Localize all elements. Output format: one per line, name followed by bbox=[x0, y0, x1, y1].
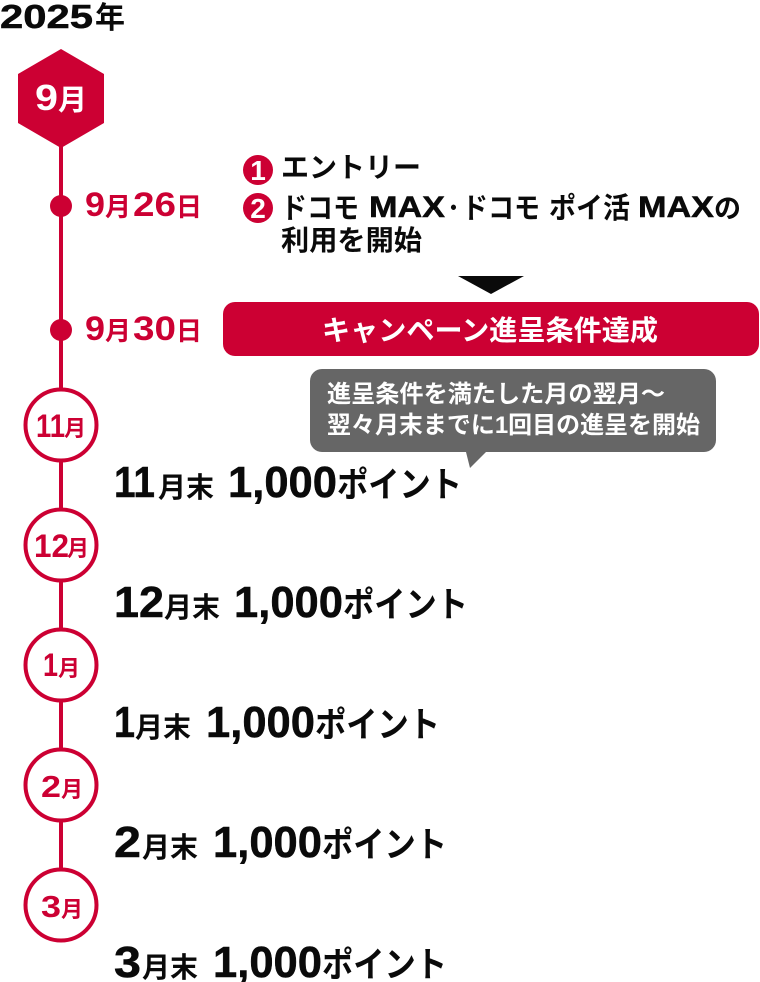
step 1: entry: 1 bbox=[250, 155, 266, 186]
title: 2025年 bbox=[0, 0, 125, 35]
reward: end of November bbox=[114, 458, 462, 507]
milestone: September hexagon: 9 bbox=[35, 77, 58, 118]
banner: campaign condition met: キャンペーン進呈条件達成 bbox=[322, 315, 658, 346]
milestone: September 30: 9 bbox=[85, 310, 105, 348]
step 2: plan start: ･ bbox=[447, 193, 460, 224]
callout: grant timing: 進呈条件を満たした月の翌月～ bbox=[327, 381, 665, 408]
banner: campaign condition met bbox=[223, 302, 759, 356]
reward: end of November: ポイント bbox=[337, 466, 462, 505]
reward: end of February: 月末 bbox=[142, 832, 198, 863]
reward: end of January: 1 bbox=[114, 698, 135, 747]
reward: end of December bbox=[114, 578, 468, 627]
month node: November: 11 bbox=[36, 408, 65, 444]
month node: January bbox=[26, 630, 96, 700]
month node: March bbox=[26, 870, 96, 940]
milestone: September 30: 月 bbox=[105, 316, 131, 346]
milestone: September 26 bbox=[50, 186, 202, 224]
reward: end of December: 12 bbox=[114, 578, 164, 627]
month node: December bbox=[26, 510, 96, 580]
milestone: September 26: 日 bbox=[176, 192, 202, 222]
reward: end of December: ポイント bbox=[343, 586, 468, 625]
step 2: plan start: 利用を開始 bbox=[281, 225, 422, 256]
milestone: September hexagon: 月 bbox=[58, 85, 87, 117]
step 1: entry: エントリー bbox=[281, 152, 421, 183]
callout: grant timing: 翌々月末までに1回目の進呈を開始 bbox=[327, 412, 700, 439]
step 2: plan start: ドコモ bbox=[281, 193, 359, 225]
title: 2025年: 年 bbox=[95, 2, 125, 35]
reward: end of January bbox=[114, 698, 440, 747]
reward: end of December: 1,000 bbox=[234, 578, 343, 627]
month node: December: 月 bbox=[67, 536, 89, 561]
reward: end of January: 1,000 bbox=[206, 698, 315, 747]
month node: November: 月 bbox=[64, 416, 86, 441]
reward: end of January: ポイント bbox=[315, 706, 440, 745]
month node: February: 2 bbox=[41, 769, 61, 804]
milestone: September 26: 月 bbox=[105, 192, 131, 222]
month node: March: 3 bbox=[41, 889, 61, 924]
timeline line bbox=[59, 140, 63, 880]
milestone: September 30 bbox=[50, 310, 202, 348]
month node: February bbox=[26, 750, 96, 820]
milestone: September 26: 9 bbox=[85, 186, 105, 224]
step 2: plan start: の bbox=[714, 194, 741, 224]
month node: January: 月 bbox=[58, 656, 80, 681]
reward: end of November: 月末 bbox=[158, 472, 214, 503]
reward: end of November: 1,000 bbox=[228, 458, 337, 507]
month node: February: 月 bbox=[61, 777, 83, 802]
milestone: September 30: 30 bbox=[133, 310, 176, 348]
reward: end of February: ポイント bbox=[322, 826, 447, 865]
reward: end of February: 2 bbox=[114, 818, 141, 867]
step 2: plan start: ポイ活 bbox=[549, 192, 630, 225]
step 2: plan start bbox=[243, 191, 741, 256]
reward: end of January: 月末 bbox=[135, 712, 191, 743]
step 2: plan start: 2 bbox=[250, 193, 266, 224]
month node: December: 12 bbox=[34, 528, 69, 564]
milestone: September 30: 日 bbox=[176, 316, 202, 346]
step 2: plan start: MAX bbox=[638, 191, 714, 224]
milestone: September hexagon bbox=[18, 49, 104, 148]
reward: end of February: 1,000 bbox=[213, 818, 322, 867]
month node: January: 1 bbox=[43, 647, 58, 683]
milestone: September 26: 26 bbox=[133, 186, 176, 224]
reward: end of November: 11 bbox=[114, 458, 155, 507]
reward: end of December: 月末 bbox=[164, 592, 220, 623]
callout: grant timing bbox=[310, 369, 716, 468]
month node: November bbox=[26, 390, 96, 460]
reward: end of March bbox=[114, 938, 447, 982]
arrow: down triangle bbox=[458, 276, 524, 294]
month node: March: 月 bbox=[61, 897, 83, 922]
step 2: plan start: ドコモ bbox=[462, 193, 540, 225]
step 2: plan start: MAX bbox=[369, 191, 445, 224]
reward: end of February bbox=[114, 818, 447, 867]
